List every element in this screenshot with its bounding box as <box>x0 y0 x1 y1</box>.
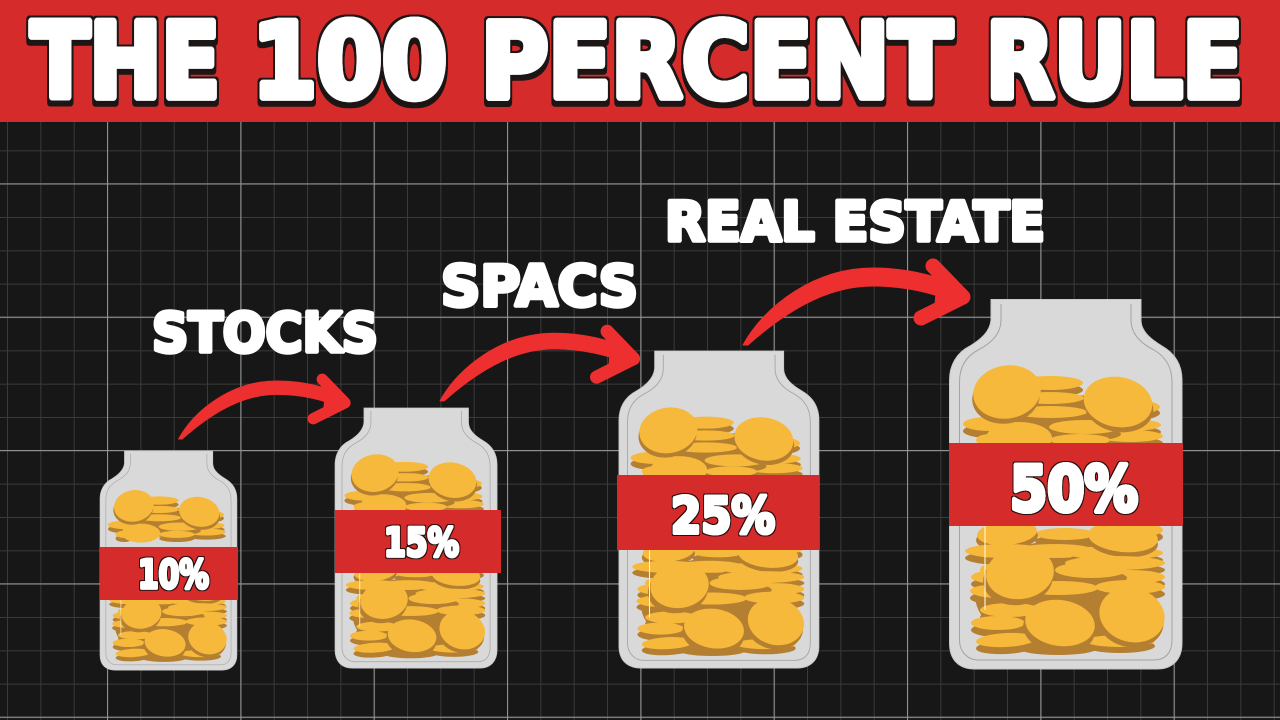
percent label: 15% <box>384 521 459 566</box>
jar: 10 percent <box>100 451 238 670</box>
jar: 15 percent <box>335 408 501 668</box>
jar body with coins <box>100 451 237 670</box>
label: stocks: STOCKS <box>152 302 378 364</box>
jar: 25 percent <box>617 351 819 668</box>
percent label: 25% <box>671 487 775 545</box>
band <box>335 510 501 573</box>
label: spacs: SPACS <box>441 254 638 320</box>
title: 100 <box>252 2 447 122</box>
arrow: spacs to 25 percent jar <box>440 331 638 401</box>
band <box>100 547 238 600</box>
band <box>617 475 819 550</box>
title: PERCENT <box>481 2 952 122</box>
title: RULE <box>986 2 1243 122</box>
arrow: stocks to 15 percent jar <box>178 379 349 439</box>
arrow: real estate to 50 percent jar <box>743 266 968 345</box>
title banner <box>0 0 1280 122</box>
jar body with coins <box>950 300 1182 669</box>
title: THE <box>31 2 220 122</box>
jar: 50 percent <box>949 300 1183 669</box>
title <box>31 2 1243 122</box>
band <box>949 443 1183 526</box>
label: real estate: REAL ESTATE <box>665 190 1045 254</box>
percent label: 50% <box>1010 452 1138 526</box>
percent label: 10% <box>138 553 209 598</box>
jar body with coins <box>619 351 819 668</box>
jar body with coins <box>335 408 497 668</box>
